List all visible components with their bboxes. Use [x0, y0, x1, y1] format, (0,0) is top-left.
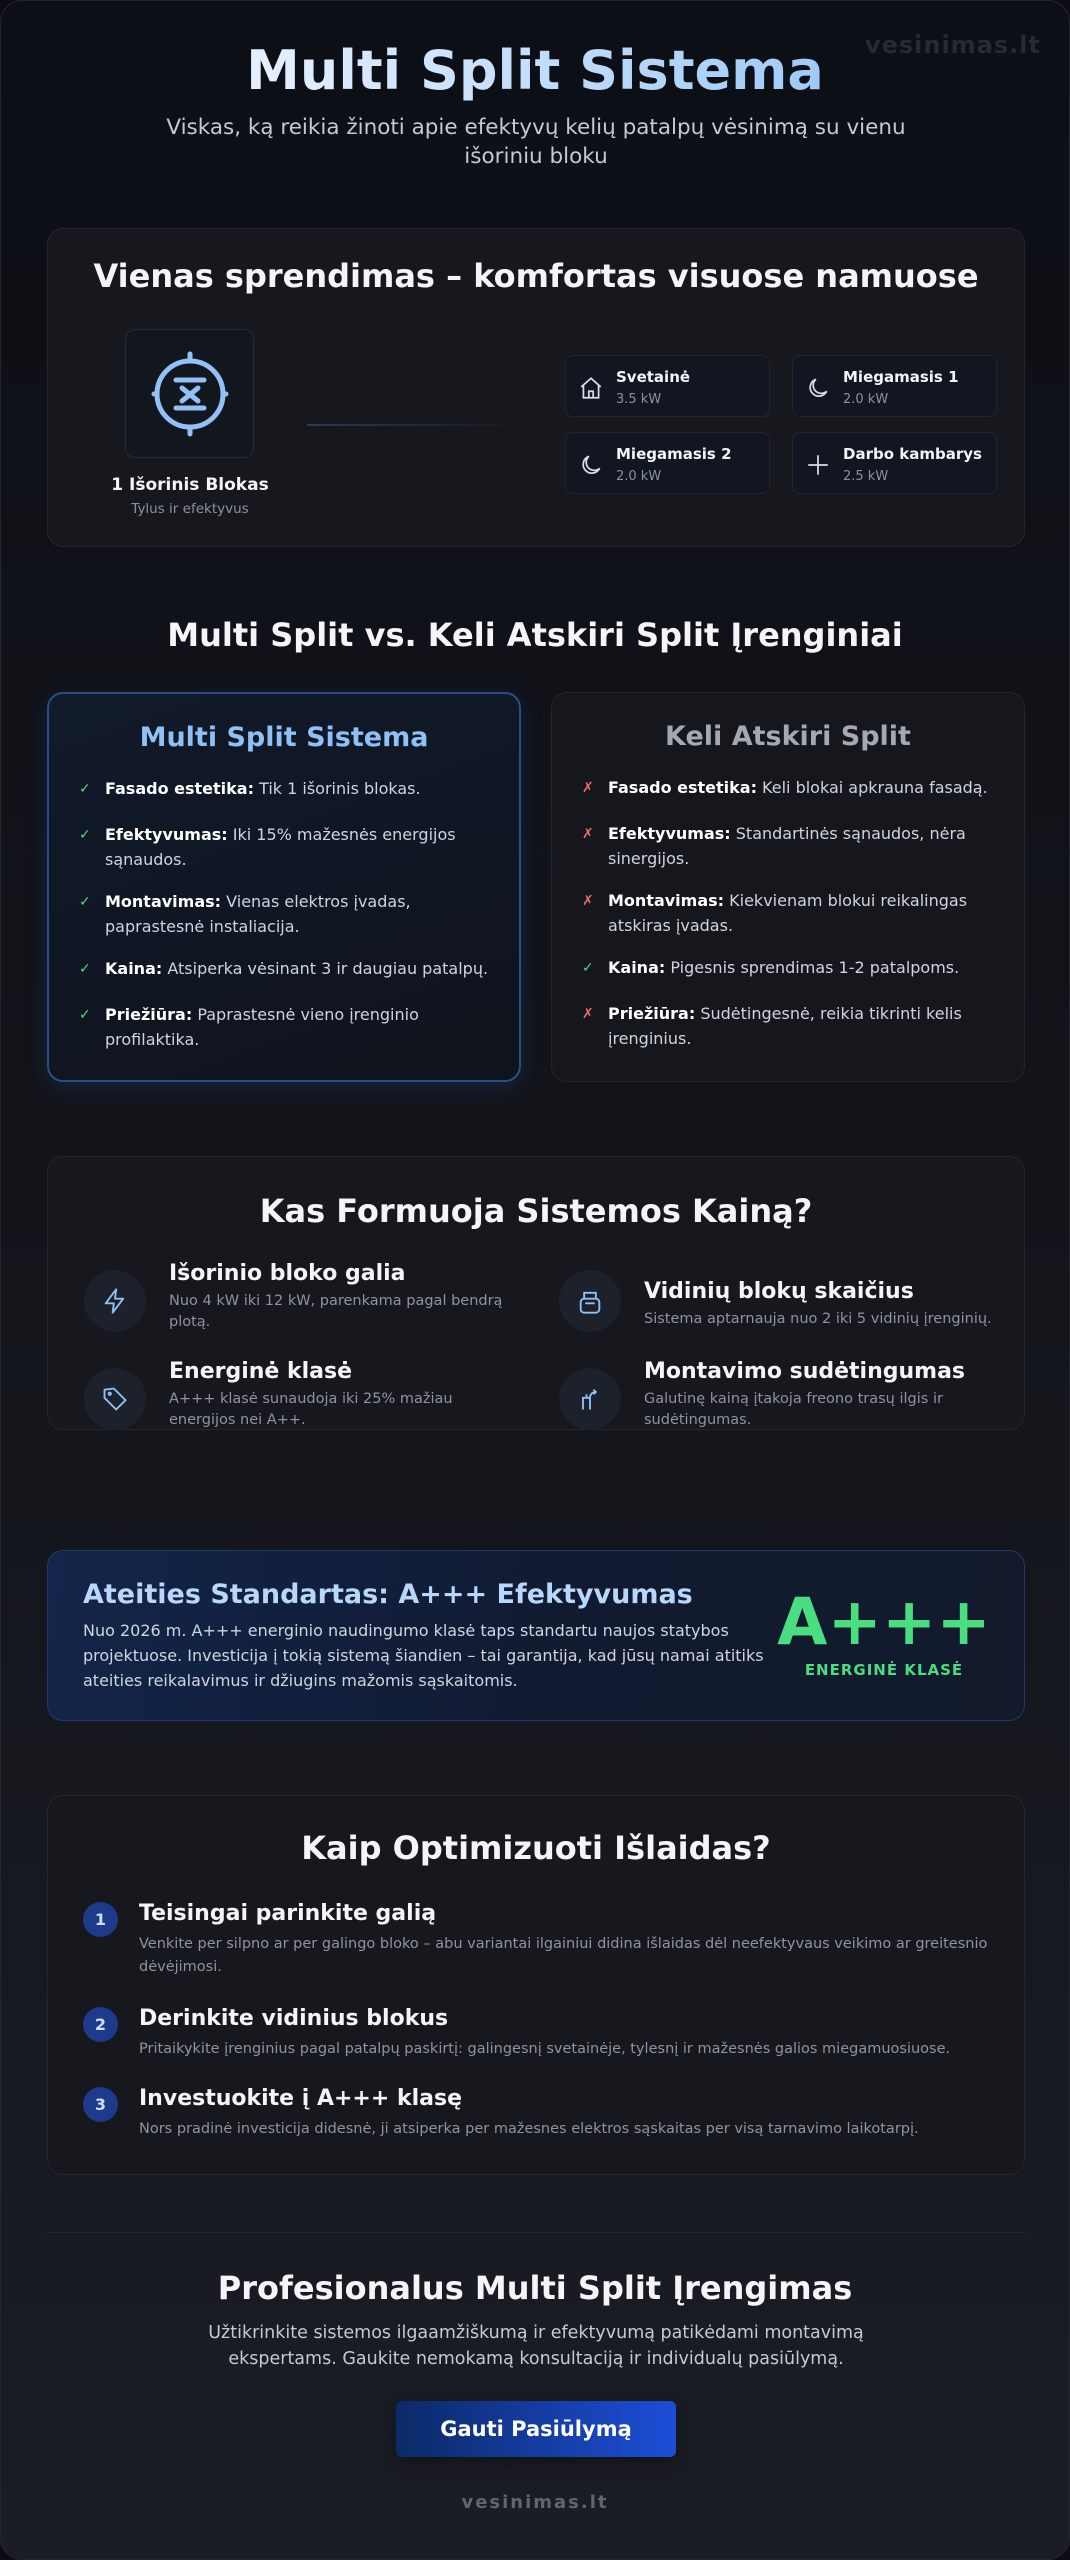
panel: price factors [47, 1156, 1025, 1430]
room: Miegamasis 1: 2.0 kW [843, 392, 888, 407]
CTA button [396, 2401, 676, 2457]
badge: A+++: A+++ [777, 1585, 991, 1660]
panel: separate split: ✗ [582, 1006, 594, 1022]
panel: one solution [47, 228, 1025, 547]
icon: outdoor unit [125, 329, 254, 458]
CTA heading: Profesionalus Multi Split Įrengimas [218, 2269, 852, 2307]
step 3: 3 [95, 2095, 106, 2114]
outdoor label: Tylus ir efektyvus [131, 501, 249, 517]
factor: power: Išorinio bloko galia [169, 1261, 406, 1286]
outdoor label: 1 Išorinis Blokas [111, 475, 269, 495]
room: Miegamasis 1: Miegamasis 1 [843, 368, 959, 386]
factor: indoor count: Vidinių blokų skaičius [644, 1279, 914, 1304]
callout: A+++ standard [47, 1550, 1025, 1721]
factor: energy class [84, 1359, 453, 1429]
factor: indoor count: Sistema aptarnauja nuo 2 iki 5 vidinių įrenginių. [644, 1311, 992, 1327]
factor: installation [559, 1359, 965, 1429]
factor: indoor count [559, 1270, 992, 1332]
card heading: Multi Split Sistema [140, 722, 428, 753]
panel: separate split: ✗ [582, 826, 594, 842]
room: Darbo kambarys [792, 432, 997, 494]
panel: price factors: Montavimo sudėtingumas [644, 1359, 965, 1384]
callout heading: Ateities Standartas: A+++ Efektyvumas [83, 1579, 693, 1610]
factor: power [84, 1261, 502, 1332]
step 1 [83, 1901, 987, 1975]
room: Svetainė: 3.5 kW [616, 392, 661, 407]
panel: separate split: ✓ [582, 960, 594, 976]
room: Darbo kambarys: 2.5 kW [843, 469, 888, 484]
panel: multi split: Priežiūra: Paprastesnė vieno įrenginio profilaktika. [105, 1005, 419, 1049]
panel: separate split [551, 692, 1025, 1082]
CTA text: Užtikrinkite sistemos ilgaamžiškumą ir efektyvumą patikėdami montavimą ekspertams. Gaukite nemokamą konsultaciją ir individualų pasiūlymą. [208, 2323, 864, 2369]
subtitle: Viskas, ką reikia žinoti apie efektyvų kelių patalpų vėsinimą su vienu išoriniu bloku [166, 115, 906, 169]
step 3: Nors pradinė investicija didesnė, ji atsiperka per mažesnes elektros sąskaitas per visą tarnavimo laikotarpį. [139, 2121, 919, 2137]
callout text: Nuo 2026 m. A+++ energinio naudingumo klasė taps standartu naujos statybos projektuose. Investicija į tokią sistemą šiandien – tai garantija, kad jūsų namai atitiks ateities reikalavimus ir džiugins mažomis sąskaitomis. [83, 1621, 764, 1690]
panel: multi split [47, 692, 521, 1082]
CTA button: Gauti Pasiūlymą [440, 2417, 632, 2441]
cons list: Fasado estetika: Keli blokai apkrauna fasadą. [608, 778, 988, 797]
room: Miegamasis 2: 2.0 kW [616, 469, 661, 484]
step 2 [83, 2006, 950, 2057]
footer: vesinimas.lt [461, 2492, 609, 2513]
step 2: 2 [95, 2015, 106, 2034]
connector line [307, 424, 508, 426]
step 2: Derinkite vidinius blokus [139, 2006, 448, 2031]
panel: separate split: ✗ [582, 780, 594, 796]
panel: price factors: Energinė klasė [169, 1359, 352, 1384]
heading: comparison: Multi Split vs. Keli Atskiri Split Įrenginiai [167, 616, 903, 654]
outdoor label [111, 475, 269, 517]
pros list: Fasado estetika: Tik 1 išorinis blokas. [105, 779, 421, 798]
heading: Kas Formuoja Sistemos Kainą? [260, 1192, 812, 1230]
panel: multi split: Montavimas: Vienas elektros įvadas, paprastesnė instaliacija. [105, 892, 411, 936]
step 3: Investuokite į A+++ klasę [139, 2086, 462, 2111]
watermark: vesinimas.lt [865, 31, 1041, 59]
card heading: Keli Atskiri Split [665, 721, 911, 752]
factor: energy class: A+++ klasė sunaudoja iki 25% mažiau energijos nei A++. [169, 1391, 453, 1428]
step 3 [83, 2086, 919, 2137]
step 1: Teisingai parinkite galią [139, 1901, 436, 1926]
panel: multi split: ✓ [79, 1007, 91, 1023]
room: Miegamasis 2 [565, 432, 770, 494]
step 1: Venkite per silpno ar per galingo bloko – abu variantai ilgainiui didina išlaidas dėl neefektyvaus veikimo ar greitesnio dėvėjimosi. [139, 1936, 987, 1975]
panel: multi split: ✓ [79, 781, 91, 797]
step 1: 1 [95, 1910, 106, 1929]
title: Multi Split Sistema [246, 39, 824, 102]
panel: multi split: Efektyvumas: Iki 15% mažesnės energijos sąnaudos. [105, 825, 456, 869]
panel: multi split: ✓ [79, 961, 91, 977]
factor: installation: Galutinę kainą įtakoja freono trasų ilgis ir sudėtingumas. [644, 1391, 943, 1428]
room: Miegamasis 1 [792, 355, 997, 417]
panel: separate split: Efektyvumas: Standartinės sąnaudos, nėra sinergijos. [608, 824, 966, 868]
heading: Kaip Optimizuoti Išlaidas? [301, 1829, 771, 1867]
panel: separate split: Montavimas: Kiekvienam blokui reikalingas atskiras įvadas. [608, 891, 967, 935]
panel: multi split: Kaina: Atsiperka vėsinant 3 ir daugiau patalpų. [105, 959, 488, 978]
room: Miegamasis 2: Miegamasis 2 [616, 445, 732, 463]
panel: separate split: Priežiūra: Sudėtingesnė, reikia tikrinti kelis įrenginius. [608, 1004, 962, 1048]
panel: multi split: ✓ [79, 827, 91, 843]
room: Svetainė [565, 355, 770, 417]
room: Darbo kambarys: Darbo kambarys [843, 445, 982, 463]
badge: A+++: ENERGINĖ KLASĖ [805, 1661, 963, 1679]
room: Svetainė: Svetainė [616, 368, 690, 386]
panel: separate split: Kaina: Pigesnis sprendimas 1-2 patalpoms. [608, 958, 959, 977]
step 2: Pritaikykite įrenginius pagal patalpų paskirtį: galingesnį svetainėje, tylesnį ir mažesnės galios miegamuosiuose. [139, 2041, 950, 2057]
heading: Vienas sprendimas – komfortas visuose namuose [93, 257, 979, 295]
panel: optimize costs [47, 1795, 1025, 2175]
panel: multi split: ✓ [79, 894, 91, 910]
panel: separate split: ✗ [582, 893, 594, 909]
factor: power: Nuo 4 kW iki 12 kW, parenkama pagal bendrą plotą. [169, 1293, 502, 1330]
